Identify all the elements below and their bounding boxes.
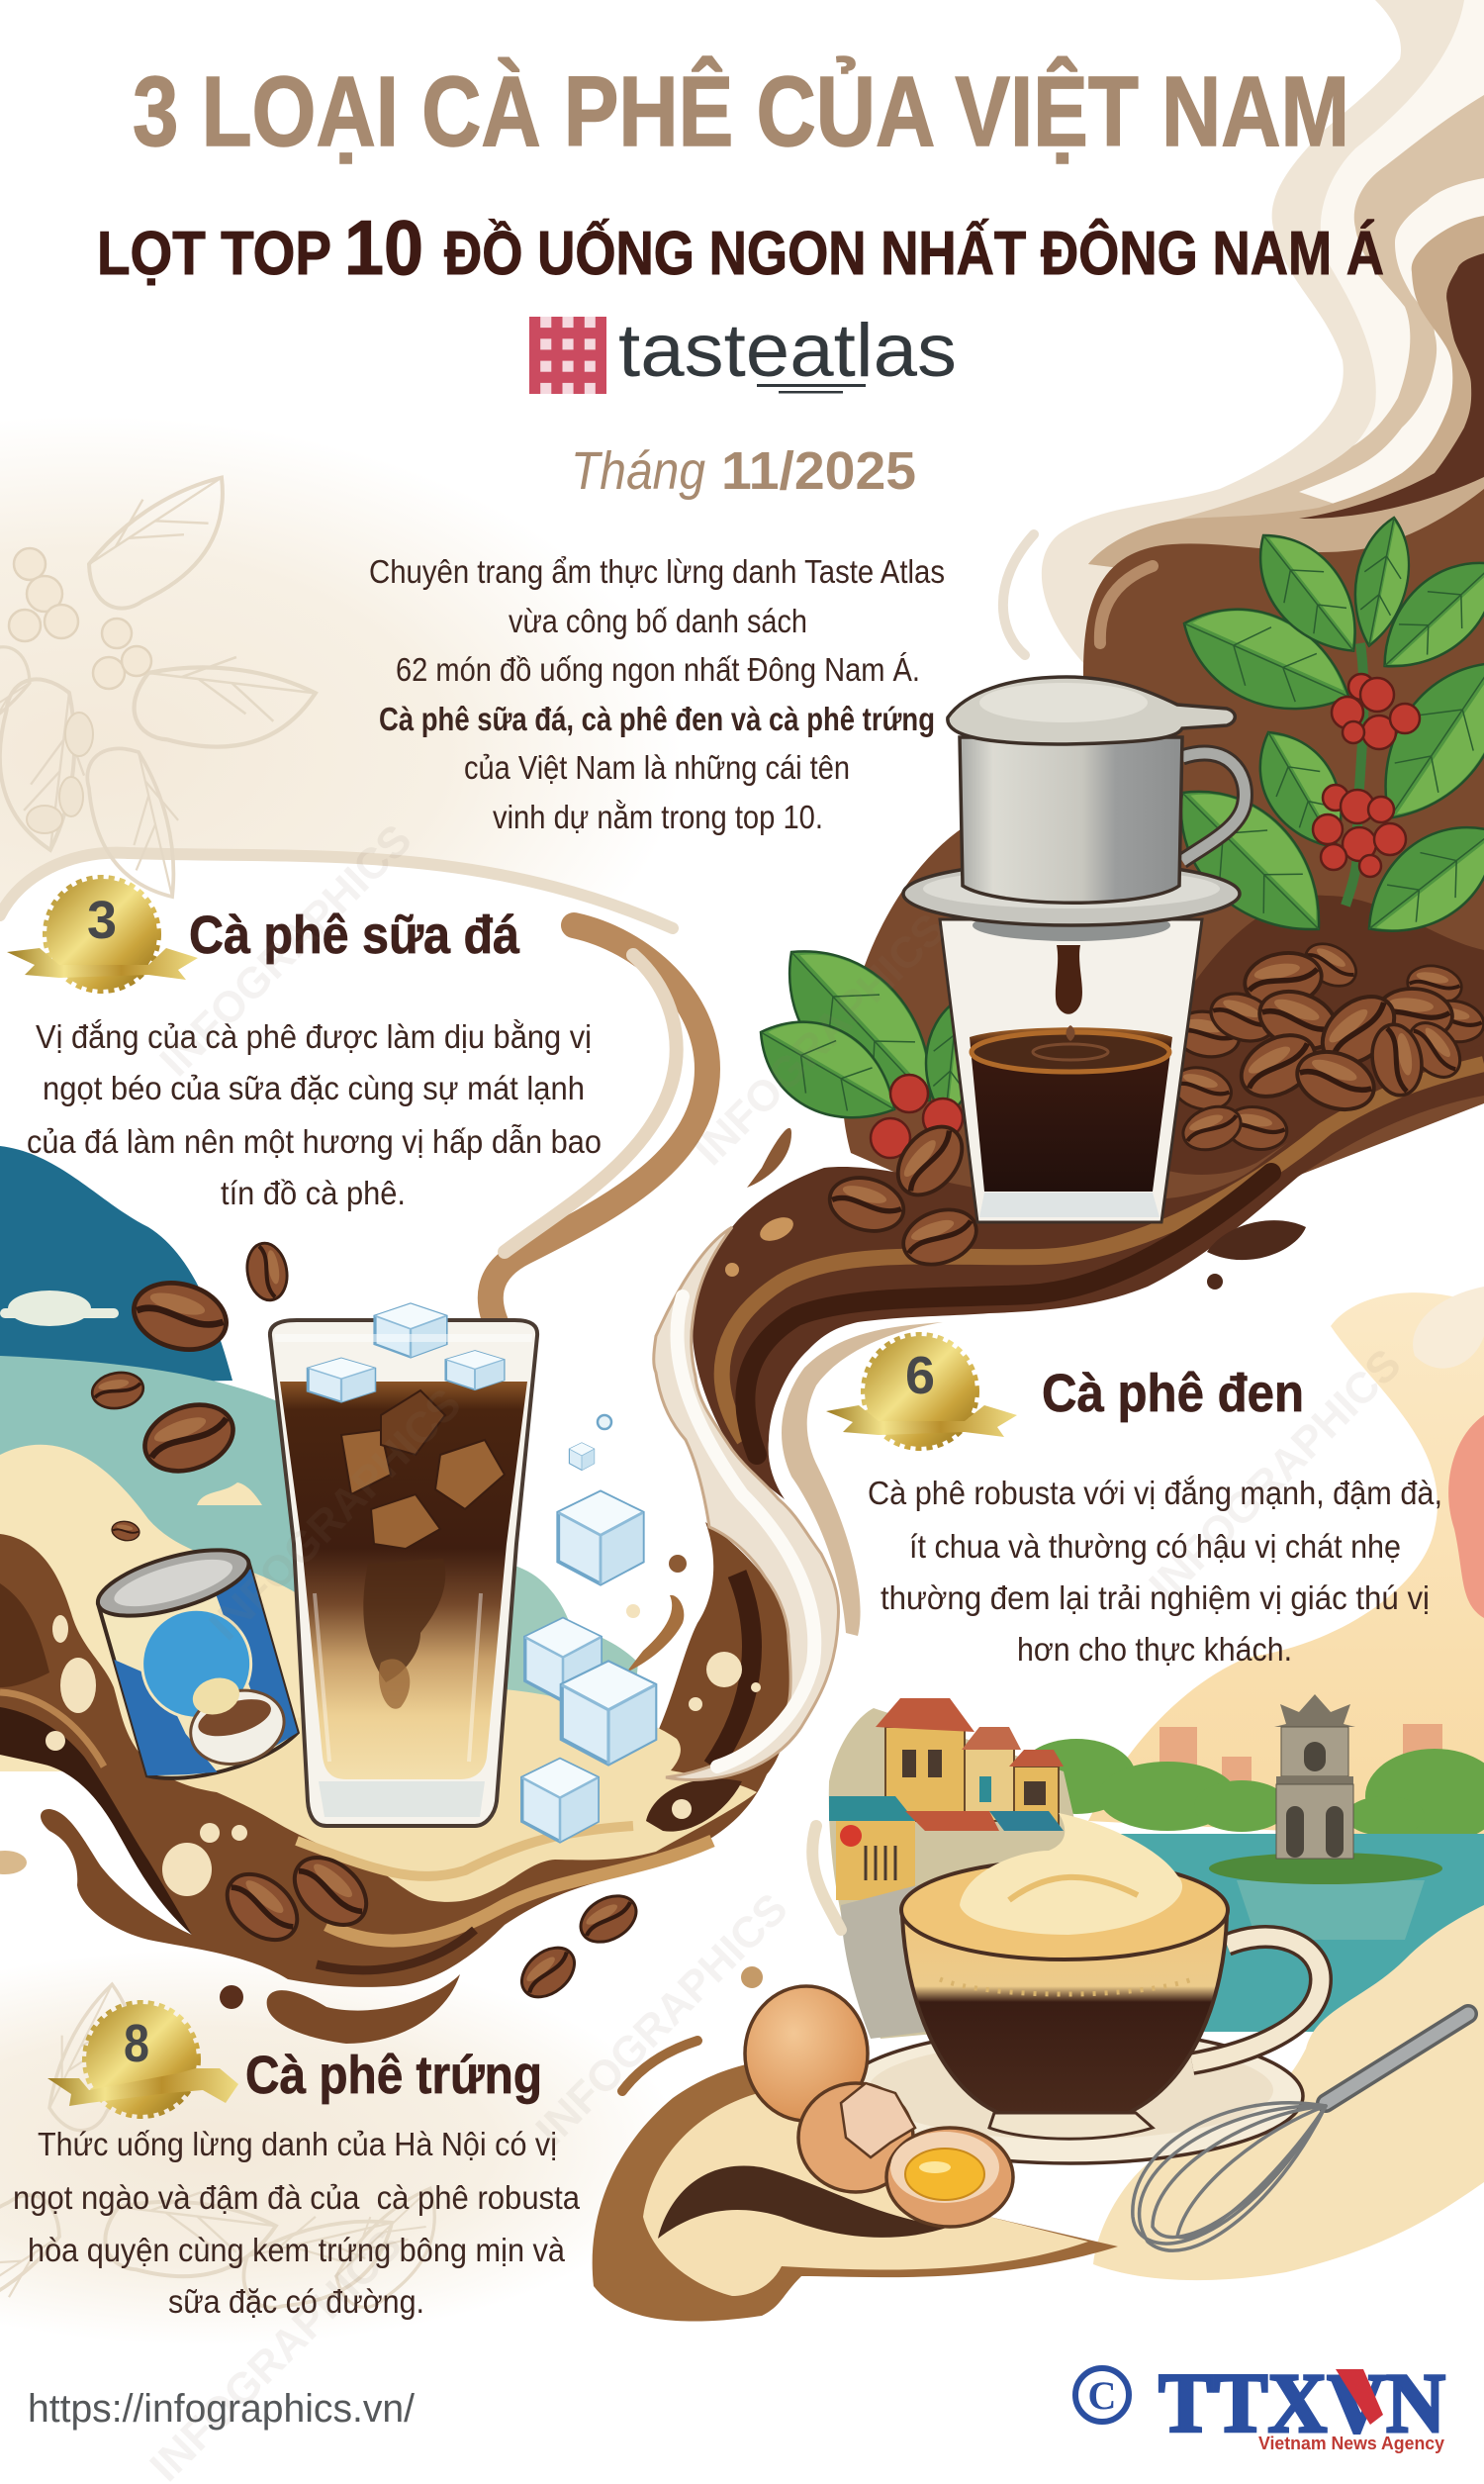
scene: Hanoi lake, trees and pagodas	[1017, 1724, 1484, 2032]
watermarks: INFOGRAPHICS	[1140, 1340, 1411, 1610]
watermarks: INFOGRAPHICS	[150, 815, 421, 1086]
section text: Cà phê trứng: Thức uống lừng danh của Hà Nội có vị	[38, 2126, 557, 2162]
icon: coffee branch lower left	[740, 919, 984, 1274]
icon: coffee mound with beans	[1158, 896, 1484, 1175]
icon: condensed milk can	[91, 1537, 302, 1791]
icon: ice cubes	[522, 1415, 655, 1842]
intro text: vừa công bố danh sách	[509, 603, 807, 639]
icon: whisk	[1133, 2014, 1468, 2250]
date: Tháng	[571, 441, 705, 501]
icon: phin filter and glass	[903, 677, 1245, 1222]
section text: Cà phê trứng: hòa quyện cùng kem trứng bông mịn và	[28, 2232, 566, 2268]
footer url: https://infographics.vn/	[28, 2387, 416, 2431]
section text: Cà phê trứng	[13, 2126, 581, 2320]
section text: Cà phê đen: hơn cho thực khách.	[1017, 1631, 1292, 1668]
section: Cà phê sữa đá rank badge	[7, 878, 198, 991]
section: Cà phê đen rank badge: 6	[905, 1346, 935, 1405]
section text: Cà phê đen	[868, 1475, 1442, 1668]
icon: coffee branch right	[1150, 513, 1484, 962]
section: Cà phê trứng rank badge: 8	[124, 2014, 149, 2073]
intro text	[369, 553, 945, 835]
section text: Cà phê sữa đá: của đá làm nên một hương vị hấp dẫn bao	[27, 1123, 602, 1160]
scene: Hanoi sky and sunset	[1088, 1287, 1484, 1841]
date	[571, 441, 916, 501]
scene: brown cream swirl under eggs	[593, 1966, 1118, 2322]
section text: Cà phê đen: Cà phê robusta với vị đắng mạnh, đậm đà,	[868, 1475, 1442, 1511]
watermarks: INFOGRAPHICS	[200, 1380, 471, 1650]
logo: TTXVN: Vietnam News Agency	[1258, 2434, 1444, 2453]
section heading: Cà phê đen: Cà phê đen	[1042, 1364, 1304, 1423]
section text: Cà phê trứng: sữa đặc có đường.	[168, 2283, 424, 2320]
section text: Cà phê đen: ít chua và thường có hậu vị chát nhẹ	[909, 1528, 1401, 1565]
subtitle	[97, 204, 1384, 291]
decoration: cream S band of swirl	[654, 1227, 839, 1779]
scene: Hoi An style houses and road	[812, 1698, 1088, 2039]
subtitle: 10	[344, 204, 423, 291]
section text: Cà phê trứng: ngọt ngào và đậm đà của cà phê robusta	[13, 2179, 581, 2216]
decoration: top right cream swirl	[1003, 0, 1484, 663]
icon: coffee beans	[89, 1240, 644, 2007]
section text: Cà phê sữa đá: Vị đắng của cà phê được làm dịu bằng vị	[36, 1018, 592, 1055]
watermarks: INFOGRAPHICS	[685, 905, 956, 1175]
section: Cà phê trứng rank badge	[47, 2003, 238, 2116]
icon: iced coffee glass	[270, 1304, 537, 1826]
copyright mark: C	[1088, 2373, 1116, 2418]
copyright mark	[1075, 2368, 1129, 2422]
intro text: Cà phê sữa đá, cà phê đen và cà phê trứng	[379, 701, 935, 737]
icon: Turtle Tower	[1274, 1694, 1355, 1859]
section text: Cà phê sữa đá: ngọt béo của sữa đặc cùng sự mát lạnh	[43, 1070, 585, 1106]
decoration: coffee splashes	[747, 1128, 1306, 1290]
logo: TasteAtlas: tasteatlas	[618, 309, 957, 393]
decoration: brown backdrop behind phin	[842, 489, 1484, 1257]
background: cream leaf area	[0, 416, 683, 2345]
intro text: Chuyên trang ẩm thực lừng danh Taste Atlas	[369, 553, 945, 590]
section text: Cà phê sữa đá	[27, 1018, 602, 1211]
background: faint coffee plant linework bottom left	[0, 1982, 440, 2348]
decoration: cream highlight stroke on brown	[1100, 566, 1153, 643]
section: Cà phê đen rank badge	[826, 1335, 1017, 1448]
section heading: Cà phê trứng: Cà phê trứng	[245, 2046, 542, 2105]
decoration: milk steam from glass	[491, 925, 707, 1331]
icon: egg coffee cup	[838, 1813, 1321, 2163]
scene: coffee and condensed milk pool	[0, 1522, 792, 2044]
section: Cà phê sữa đá rank badge: 3	[87, 891, 117, 950]
section heading: Cà phê sữa đá: Cà phê sữa đá	[189, 906, 520, 965]
section text: Cà phê đen: thường đem lại trải nghiệm vị giác thú vị	[881, 1579, 1430, 1616]
intro text: vinh dự nằm trong top 10.	[493, 799, 823, 835]
decoration: tan tail beside swirl	[782, 1322, 943, 1636]
date: 11/2025	[721, 441, 916, 501]
scene: cream foam clouds	[1093, 1905, 1484, 2280]
section text: Cà phê sữa đá: tín đồ cà phê.	[221, 1175, 406, 1211]
subtitle: LỌT TOP	[97, 220, 331, 288]
watermarks	[140, 815, 1411, 2484]
watermarks: INFOGRAPHICS	[526, 1884, 797, 2154]
decoration: dark coffee river	[693, 1039, 1484, 1499]
logo: TTXVN: TTXVN	[1159, 2355, 1445, 2450]
intro text: 62 món đồ uống ngon nhất Đông Nam Á.	[396, 651, 920, 688]
watermarks: INFOGRAPHICS	[140, 2221, 412, 2484]
intro text: của Việt Nam là những cái tên	[464, 749, 850, 786]
icon: eggs	[745, 1986, 1013, 2227]
scene: sky and sea behind iced coffee	[0, 1146, 638, 1771]
background: faint coffee plant linework top left	[0, 445, 323, 906]
